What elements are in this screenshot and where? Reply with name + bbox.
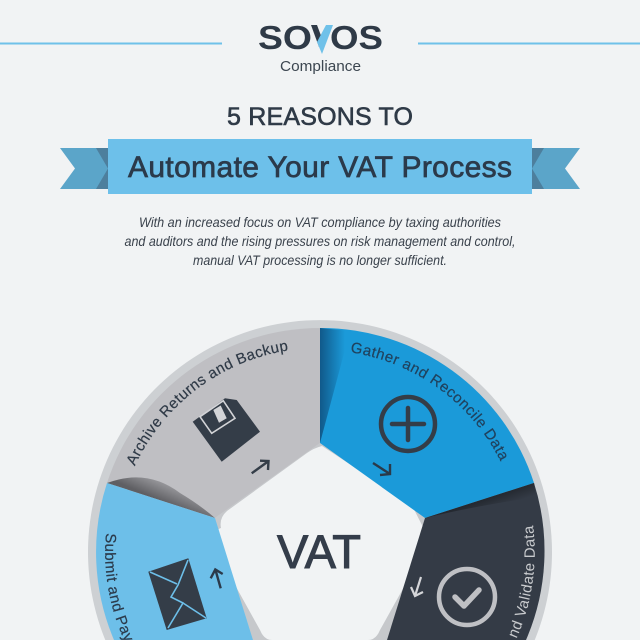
arrow (373, 463, 390, 475)
ribbon tail left (60, 148, 108, 189)
label: archive: Archive Returns and Backup (127, 342, 288, 466)
arrow (252, 461, 268, 473)
segment: submit and pay (96, 483, 253, 640)
segment: archive returns and backup (107, 328, 320, 518)
arrow (411, 577, 423, 596)
ribbon main (108, 139, 532, 194)
icon: envelope (148, 558, 207, 630)
logo: Sovos Compliance: SO (258, 19, 312, 56)
header rule right (418, 42, 640, 44)
logo: Sovos Compliance: OS (330, 19, 383, 56)
logo: Sovos Compliance (258, 19, 383, 75)
center hub (210, 446, 430, 640)
icon: plus circle (381, 397, 435, 451)
icon: check circle (439, 569, 495, 625)
hub label: VAT: VAT (277, 525, 361, 578)
ribbon banner (60, 139, 580, 194)
arrow (211, 570, 223, 588)
intro paragraph (124, 214, 516, 268)
intro paragraph: and auditors and the rising pressures on risk management and control, (124, 233, 516, 249)
segment shadow (107, 477, 215, 518)
ribbon fold left (96, 148, 108, 189)
segment shadow (320, 328, 350, 443)
logo: Sovos Compliance: Compliance (280, 58, 361, 75)
ribbon tail right (532, 148, 580, 189)
outer ring (88, 320, 552, 640)
heading: 5 reasons to: 5 REASONS TO (227, 103, 413, 131)
intro paragraph: With an increased focus on VAT compliance by taxing authorities (139, 214, 501, 230)
header rule left (0, 42, 222, 44)
label: gather: Gather and Reconcile Data (352, 342, 506, 462)
segment shadow (425, 483, 536, 518)
ribbon fold right (532, 148, 544, 189)
intro paragraph: manual VAT processing is no longer sufficient. (193, 252, 447, 268)
hub backing (215, 443, 425, 640)
icon: floppy disk (193, 398, 260, 462)
ribbon title: Automate Your VAT Process (128, 151, 512, 184)
segment: gather and reconcile data (320, 328, 534, 518)
